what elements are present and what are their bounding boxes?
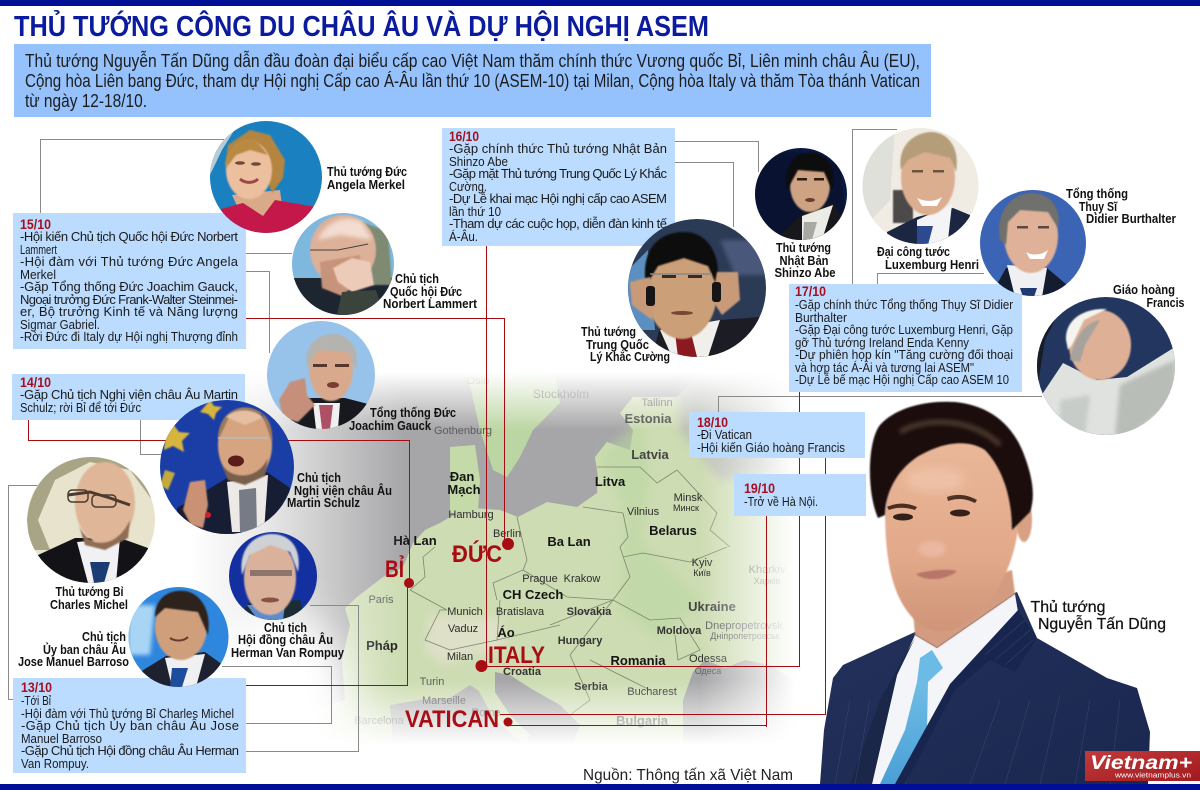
panel: 15/10: Ngoại trưởng Đức Frank-Walter Steinmei- xyxy=(20,292,238,307)
land: continental Europe xyxy=(341,392,781,734)
panel: 16/10 xyxy=(442,128,675,246)
portrait: Pope Francis xyxy=(1037,297,1175,436)
source: Nguồn: Thông tấn xã Việt Nam xyxy=(583,767,793,784)
panel: 19/10: 19/10 xyxy=(744,481,775,496)
name labels: Trung Quốc xyxy=(586,338,649,352)
name labels: Chủ tịch xyxy=(297,471,341,485)
map labels: Serbia xyxy=(574,681,609,693)
panel: 15/10: Sigmar Gabriel. xyxy=(20,317,100,332)
map labels: Dnepropetrovsk xyxy=(705,620,783,632)
map markers: countries: BỈ xyxy=(385,554,404,583)
land: Alps tint xyxy=(425,615,505,665)
map labels: CH Czech xyxy=(503,587,563,602)
map markers: countries: ĐỨC xyxy=(452,540,502,568)
name labels: Tổng thống Đức xyxy=(370,406,456,420)
name labels: Lý Khắc Cường xyxy=(590,349,670,364)
panel: 16/10: -Gặp mặt Thủ tướng Trung Quốc Lý Khắc xyxy=(449,166,668,181)
panel: 15/10: Merkel xyxy=(20,267,56,282)
portrait: Grand Duke Henri xyxy=(862,128,979,245)
name labels xyxy=(18,165,1185,669)
map labels: Đan xyxy=(450,469,474,484)
top bar xyxy=(0,0,1200,6)
map labels: Rome xyxy=(471,707,501,719)
name labels: Martin Schulz xyxy=(287,496,360,510)
panel: 15/10: -Hội kiến Chủ tịch Quốc hội Đức Norbert xyxy=(20,229,238,244)
panel: 19/10 xyxy=(734,474,866,516)
connector lines xyxy=(8,130,1042,752)
panel: 16/10: 16/10 xyxy=(449,129,479,144)
portrait: Norbert Lammert xyxy=(292,213,394,315)
logo: Vietnam+ xyxy=(1085,751,1200,781)
panel: 18/10 xyxy=(689,412,865,458)
panel: 16/10: -Gặp chính thức Thủ tướng Nhật Bản xyxy=(449,141,667,156)
panel: 17/10: 17/10 xyxy=(795,284,826,299)
map labels: Milan xyxy=(447,651,473,663)
map markers: countries xyxy=(385,538,545,733)
name labels: Thụy Sĩ xyxy=(1079,200,1118,214)
name labels: Thủ tướng Bỉ xyxy=(56,585,124,599)
panel: 13/10: Manuel Barroso xyxy=(21,731,102,746)
panel: 13/10: Van Rompuy. xyxy=(21,756,89,771)
map labels: Slovakia xyxy=(567,606,612,618)
map labels: Vaduz xyxy=(448,623,478,635)
map labels: Marseille xyxy=(422,695,466,707)
name labels: Nguyễn Tấn Dũng xyxy=(1038,614,1166,633)
name labels: Didier Burthalter xyxy=(1086,212,1176,226)
portrait: Angela Merkel xyxy=(210,121,322,233)
portrait: Herman Van Rompuy xyxy=(229,532,317,620)
map labels: Stockholm xyxy=(533,387,589,401)
panel: 15/10: er, Bộ trưởng Kinh tế và Năng lượng xyxy=(20,304,238,319)
panel: 15/10: -Rời Đức đi Italy dự Hội nghị Thượng đỉnh xyxy=(20,329,238,344)
panel: 14/10: Schulz; rời Bỉ để tới Đức xyxy=(20,400,141,415)
map labels: Ba Lan xyxy=(547,534,591,549)
panel: 17/10: -Gặp Đại công tước Luxemburg Henri, Gặp xyxy=(795,322,1013,337)
logo: Vietnam+: www.vietnamplus.vn xyxy=(1114,770,1191,780)
map labels: Moldova xyxy=(657,625,702,637)
name labels: Chủ tịch xyxy=(264,621,307,635)
intro panel xyxy=(14,44,931,117)
map labels: Áo xyxy=(497,625,515,640)
panel: 17/10: -Gặp chính thức Tổng thống Thụy Sĩ Didier xyxy=(795,297,1014,312)
panel: 16/10: Cường. xyxy=(449,179,487,194)
map labels: Tallinn xyxy=(641,397,673,409)
panel: 17/10: -Dự Lễ bế mạc Hội nghị Cấp cao ASEM 10 xyxy=(795,372,1009,387)
name labels: Chủ tịch xyxy=(395,272,439,286)
map labels: Belarus xyxy=(649,523,697,538)
map labels: Київ xyxy=(693,568,711,578)
portrait: Shinzo Abe xyxy=(755,148,847,240)
panel: 13/10: -Hội đàm với Thủ tướng Bỉ Charles Michel xyxy=(21,706,234,721)
map labels: Estonia xyxy=(625,411,672,426)
map labels: Hamburg xyxy=(448,509,494,521)
name labels: Tổng thống xyxy=(1066,187,1128,201)
name labels: Jose Manuel Barroso xyxy=(18,655,129,669)
panel: 13/10: -Gặp Chủ tịch Ủy ban châu Âu Jose xyxy=(21,718,239,733)
name labels: Nhật Bản xyxy=(780,254,828,268)
panel: 16/10: -Dự Lễ khai mạc Hội nghị cấp cao ASEM xyxy=(449,191,667,206)
map labels: Bratislava xyxy=(496,606,545,618)
map fade overlays xyxy=(190,372,810,790)
panel: 17/10: -Dự phiên họp kín "Tăng cường đối thoại xyxy=(795,347,1013,362)
name labels: Hội đồng châu Âu xyxy=(238,632,333,647)
name labels: Herman Van Rompuy xyxy=(231,646,344,660)
panel: 18/10: -Đi Vatican xyxy=(697,427,752,442)
map labels: Одеса xyxy=(695,666,721,676)
panel: 17/10: và hợp tác Á-Âi và tương lai ASEM" xyxy=(795,360,974,375)
map markers: countries: VATICAN xyxy=(405,706,499,733)
map labels xyxy=(354,375,786,728)
portrait: Li Keqiang xyxy=(628,219,766,357)
panel: 16/10: lần thứ 10 xyxy=(449,204,501,219)
map labels: Ukraine xyxy=(688,599,736,614)
portrait: Martin Schulz xyxy=(160,400,294,534)
map labels: Vilnius xyxy=(627,506,660,518)
panel: 14/10 xyxy=(12,374,245,420)
map labels: Минск xyxy=(673,503,699,513)
map labels: Kyiv xyxy=(692,557,713,569)
map labels: Дніпропетровськ xyxy=(710,631,780,641)
name labels: Nghị viện châu Âu xyxy=(294,483,392,498)
map labels: Odessa xyxy=(689,653,728,665)
name labels: Chủ tịch xyxy=(82,630,126,644)
panel: 19/10: -Trở về Hà Nội. xyxy=(744,494,818,509)
sea: Mediterranean xyxy=(390,685,508,732)
panel: 16/10: Á-Âu. xyxy=(449,229,478,244)
name labels: Thủ tướng xyxy=(1030,599,1106,616)
panel: 15/10 xyxy=(13,213,246,349)
map labels: Oslo xyxy=(467,375,489,387)
portrait: Joachim Gauck xyxy=(267,321,375,429)
map labels: Krakow xyxy=(564,573,600,585)
name labels: Thủ tướng xyxy=(776,241,831,255)
logo: Vietnam+: Vietnam+ xyxy=(1090,753,1192,774)
map labels: Kharkiv xyxy=(749,564,786,576)
panel: 16/10: -Tham dự các cuộc họp, diễn đàn kinh tế xyxy=(449,216,668,231)
name labels: Norbert Lammert xyxy=(383,297,478,311)
map labels: Latvia xyxy=(631,447,670,462)
land: grey north-east haze xyxy=(678,388,768,480)
name labels: Thủ tướng Đức xyxy=(327,165,407,179)
name labels: Giáo hoàng xyxy=(1113,283,1175,297)
name labels: Luxemburg Henri xyxy=(885,258,979,272)
map labels: Hà Lan xyxy=(393,533,437,548)
panel: 13/10: -Tới Bỉ xyxy=(21,693,51,708)
panel: 13/10: 13/10 xyxy=(21,680,52,695)
portrait: Prime Minister Nguyễn Tấn Dũng xyxy=(820,402,1150,784)
map labels: Харків xyxy=(754,576,781,586)
map labels: Pháp xyxy=(366,638,398,653)
land: Italy south xyxy=(478,690,529,734)
intro panel: từ ngày 12-18/10. xyxy=(25,91,147,111)
name labels: Ủy ban châu Âu xyxy=(43,642,126,657)
land: Scandinavia xyxy=(470,382,560,477)
name labels: Quốc hội Đức xyxy=(390,285,462,299)
panel: 15/10: Lammert xyxy=(20,242,57,257)
map labels: Paris xyxy=(368,594,394,606)
panel: 17/10 xyxy=(789,284,1022,392)
national borders xyxy=(410,467,730,715)
panel: 17/10: Burthalter xyxy=(795,310,848,325)
panel: 16/10: Shinzo Abe xyxy=(449,154,508,169)
panel: 13/10: -Gặp Chủ tịch Hội đồng châu Âu Herman xyxy=(21,743,239,758)
panel: 18/10: 18/10 xyxy=(697,415,728,430)
panel: 14/10: 14/10 xyxy=(20,375,51,390)
map labels: Munich xyxy=(447,606,483,618)
name labels: Charles Michel xyxy=(50,598,128,612)
land: green tint xyxy=(606,427,692,633)
portrait: Charles Michel xyxy=(27,457,155,583)
panel: 13/10 xyxy=(13,678,246,773)
map labels: Gothenburg xyxy=(434,425,492,437)
map labels: Croatia xyxy=(503,666,542,678)
name labels: Thủ tướng xyxy=(581,325,636,339)
map of Europe xyxy=(217,376,786,739)
name labels: Angela Merkel xyxy=(327,178,405,192)
map labels: Minsk xyxy=(674,492,703,504)
map labels: Turin xyxy=(420,676,444,688)
map labels: Mạch xyxy=(447,482,481,497)
panel: 14/10: -Gặp Chủ tịch Nghị viện châu Âu Martin xyxy=(20,387,238,402)
panel: 15/10: -Gặp Tổng thống Đức Joachim Gauck, xyxy=(20,279,238,294)
name labels: Francis xyxy=(1146,296,1185,310)
map labels: Prague xyxy=(522,573,558,585)
map labels: Berlin xyxy=(493,528,521,540)
title: THỦ TƯỚNG CÔNG DU CHÂU ÂU VÀ DỰ HỘI NGHỊ ASEM xyxy=(14,9,709,43)
bottom bar xyxy=(0,784,1200,790)
intro panel: Cộng hòa Liên bang Đức, tham dự Hội nghị Cấp cao Á-Âu lần thứ 10 (ASEM-10) tại Milan, Cộng hòa Italy và thăm Tòa thánh Vatican xyxy=(25,71,920,91)
intro panel: Thủ tướng Nguyễn Tấn Dũng dẫn đầu đoàn đại biểu cấp cao Việt Nam thăm chính thức Vương quốc Bỉ, Liên minh châu Âu (EU), xyxy=(25,50,920,71)
panel: 18/10: -Hội kiến Giáo hoàng Francis xyxy=(697,440,845,455)
map labels: Barcelona xyxy=(354,715,405,727)
portrait: Didier Burkhalter xyxy=(980,190,1086,297)
land: Denmark xyxy=(450,445,480,515)
map labels: Bulgaria xyxy=(616,713,669,728)
map labels: Bucharest xyxy=(627,686,677,698)
name labels: Shinzo Abe xyxy=(774,266,836,280)
name labels: Joachim Gauck xyxy=(349,419,431,433)
sea: Adriatic xyxy=(495,672,580,734)
panel: 15/10: 15/10 xyxy=(20,217,51,232)
map markers: countries: ITALY xyxy=(488,642,545,669)
name labels: Đại công tước xyxy=(877,245,950,259)
sea: Black Sea xyxy=(683,660,781,735)
portrait: Jose Manuel Barroso xyxy=(128,587,229,687)
panel: 17/10: gỡ Thủ tướng Ireland Enda Kenny xyxy=(795,335,969,350)
map labels: Litva xyxy=(595,474,626,489)
panel: 15/10: -Hội đàm với Thủ tướng Đức Angela xyxy=(20,254,239,269)
map labels: Hungary xyxy=(558,635,603,647)
map labels: Romania xyxy=(611,653,666,668)
